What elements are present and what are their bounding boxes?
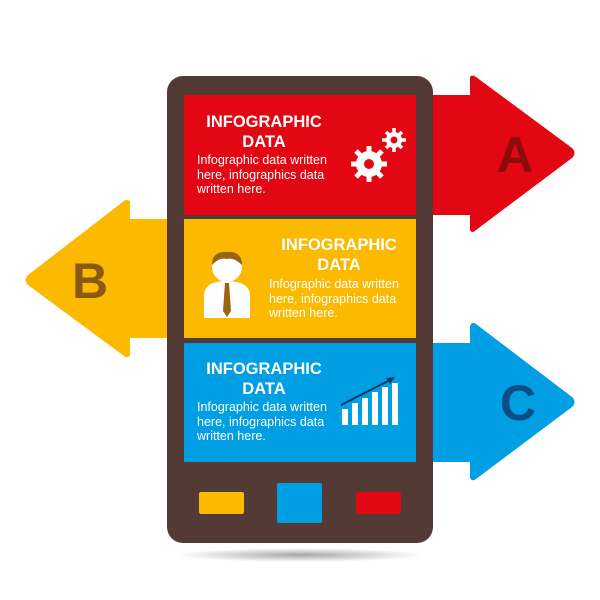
heading red: DATA [242, 133, 286, 151]
icon: bar chart [340, 377, 398, 425]
text blue: written here. [197, 429, 266, 443]
panel: blue [184, 343, 416, 462]
heading yellow [281, 236, 397, 274]
text red: written here. [197, 182, 266, 196]
text blue [197, 400, 327, 443]
arrow B [26, 200, 180, 357]
heading blue: INFOGRAPHIC [206, 360, 322, 378]
arrow C: C [500, 375, 536, 431]
shadow [175, 548, 425, 562]
heading blue [206, 360, 322, 398]
heading blue: DATA [242, 380, 286, 398]
button yellow [199, 492, 244, 514]
phone [167, 76, 433, 543]
text yellow: Infographic data written [269, 277, 399, 291]
text yellow: written here. [269, 306, 338, 320]
arrow A: A [497, 127, 533, 183]
arrow B: B [72, 253, 108, 309]
text blue: here, infographics data [197, 414, 324, 428]
button blue [277, 483, 322, 523]
text blue: Infographic data written [197, 400, 327, 414]
heading red: INFOGRAPHIC [206, 113, 322, 131]
text yellow [269, 277, 399, 320]
icon: gears [351, 128, 406, 182]
panel: red [184, 95, 416, 215]
text red [197, 153, 327, 196]
button red [356, 492, 401, 514]
text red: Infographic data written [197, 153, 327, 167]
arrow A [420, 76, 574, 232]
heading yellow: INFOGRAPHIC [281, 236, 397, 254]
heading yellow: DATA [317, 256, 361, 274]
icon: person [204, 252, 250, 318]
panel: yellow [184, 219, 416, 338]
text yellow: here, infographics data [269, 292, 396, 306]
arrow C [420, 323, 574, 480]
text red: here, infographics data [197, 168, 324, 182]
heading red [206, 113, 322, 151]
